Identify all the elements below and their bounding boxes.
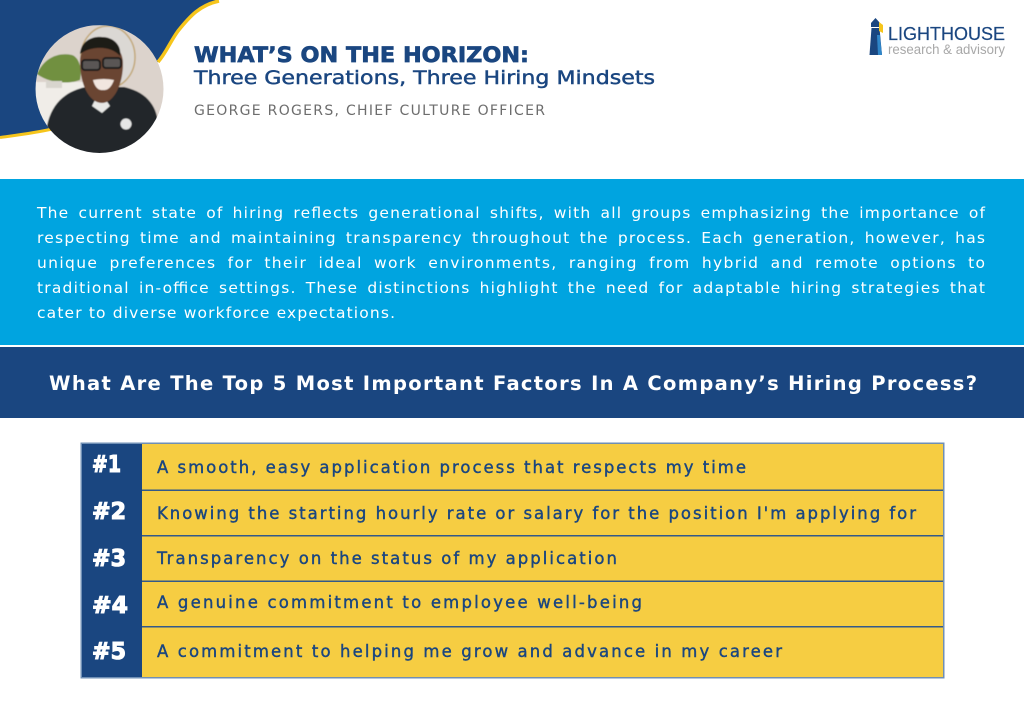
ranked factors table [80, 442, 944, 678]
logo wordmark: LIGHTHOUSE [888, 23, 1005, 44]
byline: GEORGE ROGERS, CHIEF CULTURE OFFICER [194, 103, 545, 119]
paragraph text: unique preferences for their ideal work environments, ranging from hybrid and remote options to [37, 254, 985, 272]
paragraph text [36, 204, 986, 322]
banner heading: What Are The Top 5 Most Important Factors In A Company’s Hiring Process? [49, 372, 977, 395]
icon: lighthouse [870, 18, 883, 55]
header swoosh [0, 0, 219, 138]
portrait photo [35, 25, 165, 155]
subtitle: Three Generations, Three Hiring Mindsets [193, 67, 655, 89]
row 2 [92, 499, 916, 525]
logo: Lighthouse research and advisory [870, 18, 1005, 57]
row 3: #3 [92, 546, 126, 572]
paragraph text: The current state of hiring reflects generational shifts, with all groups emphasizing the importance of [36, 204, 986, 222]
title: main heading: WHAT’S ON THE HORIZON: [194, 43, 529, 68]
paragraph text: cater to diverse workforce expectations. [37, 304, 395, 322]
title block [193, 43, 655, 119]
row 4 [92, 593, 642, 619]
paragraph text: respecting time and maintaining transparency throughout the process. Each generation, however, has [37, 229, 985, 247]
row 2: Knowing the starting hourly rate or salary for the position I'm applying for [157, 504, 916, 523]
row 4: A genuine commitment to employee well-being [157, 593, 642, 612]
row 5: #5 [92, 639, 126, 665]
row 2: #2 [92, 499, 126, 525]
paragraph text: traditional in-office settings. These distinctions highlight the need for adaptable hiring strategies that [37, 279, 985, 297]
logo tagline: research & advisory [888, 42, 1005, 57]
row 3: Transparency on the status of my application [156, 549, 617, 568]
panel: intro paragraph [0, 179, 1024, 345]
row 1: #1 [92, 452, 121, 478]
row 5 [92, 639, 782, 665]
row 5: A commitment to helping me grow and advance in my career [157, 642, 782, 661]
row 4: #4 [92, 593, 128, 619]
panel: question banner [0, 347, 1024, 418]
row 1: A smooth, easy application process that respects my time [157, 458, 746, 477]
row 3 [92, 546, 617, 572]
row 1 [92, 452, 746, 478]
